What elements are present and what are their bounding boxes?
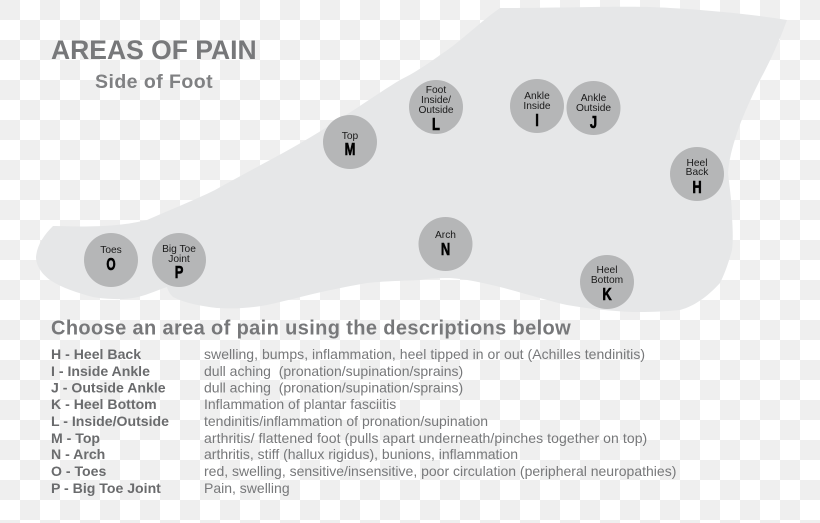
marker: Foot Inside/Outside L: Outside xyxy=(418,105,454,116)
marker: Top M xyxy=(323,115,377,169)
marker: Big Toe Joint P: P xyxy=(175,263,183,283)
marker: Heel Back H xyxy=(670,147,724,201)
description list: J - Outside Ankle xyxy=(51,380,166,396)
marker: Foot Inside/Outside L: L xyxy=(432,115,440,135)
foot silhouette xyxy=(36,7,787,312)
marker: Heel Bottom K: K xyxy=(602,285,612,305)
marker: Heel Back H: Heel xyxy=(687,158,707,169)
marker: Ankle Outside J: Ankle xyxy=(581,93,607,104)
description list: O - Toes xyxy=(51,463,106,479)
marker: Heel Bottom K xyxy=(580,255,634,309)
description list: P - Big Toe Joint xyxy=(51,480,161,496)
marker: Toes O: O xyxy=(106,255,116,275)
marker: Ankle Outside J: J xyxy=(590,113,597,133)
description list: Pain, swelling xyxy=(204,480,290,496)
description list: Inflammation of plantar fasciitis xyxy=(204,396,396,412)
description list xyxy=(51,346,676,496)
marker: Big Toe Joint P xyxy=(152,233,206,287)
description list: N - Arch xyxy=(51,446,105,462)
marker: Ankle Inside I: Inside xyxy=(523,101,551,112)
description list: arthritis/ flattened foot (pulls apart underneath/pinches together on top) xyxy=(204,430,647,446)
description list: swelling, bumps, inflammation, heel tipped in or out (Achilles tendinitis) xyxy=(204,346,645,362)
marker: Arch N: Arch xyxy=(435,230,456,241)
marker: Ankle Outside J xyxy=(566,81,620,135)
description list: I - Inside Ankle xyxy=(51,363,150,379)
marker: Ankle Inside I: Ankle xyxy=(524,91,550,102)
marker: Big Toe Joint P: Joint xyxy=(168,254,190,265)
description list: H - Heel Back xyxy=(51,346,141,362)
marker: Toes O xyxy=(84,233,138,287)
marker: Foot Inside/Outside L: Inside/ xyxy=(421,95,451,106)
description list: arthritis, stiff (hallux rigidus), bunions, inflammation xyxy=(204,446,518,462)
marker: Top M: M xyxy=(345,140,355,160)
marker: Arch N: N xyxy=(441,240,450,260)
description list: L - Inside/Outside xyxy=(51,413,169,429)
marker: Ankle Outside J: Outside xyxy=(576,103,611,114)
description list: tendinitis/inflammation of pronation/supination xyxy=(204,413,488,429)
marker: Big Toe Joint P: Big Toe xyxy=(162,244,196,255)
marker: Heel Bottom K: Heel xyxy=(597,265,617,276)
section heading: Choose an area of pain using the descriptions below xyxy=(51,318,571,340)
marker: Ankle Inside I xyxy=(510,79,564,133)
marker: Ankle Inside I: I xyxy=(535,111,539,131)
description list: K - Heel Bottom xyxy=(51,396,157,412)
marker: Heel Back H: H xyxy=(692,178,702,198)
description list: dull aching (pronation/supination/sprains) xyxy=(204,363,463,379)
marker: Foot Inside/Outside L xyxy=(409,80,463,135)
marker: Heel Bottom K: Bottom xyxy=(591,275,623,286)
marker: Foot Inside/Outside L: Foot xyxy=(426,85,446,96)
marker: Toes O: Toes xyxy=(100,245,122,256)
description list: M - Top xyxy=(51,430,100,446)
title: AREAS OF PAIN xyxy=(51,35,257,65)
marker: Heel Back H: Back xyxy=(686,167,709,178)
subtitle: Side of Foot xyxy=(95,71,213,93)
description list: dull aching (pronation/supination/sprains) xyxy=(204,380,463,396)
marker: Arch N xyxy=(418,217,472,271)
description list: red, swelling, sensitive/insensitive, poor circulation (peripheral neuropathies) xyxy=(204,463,676,479)
marker: Top M: Top xyxy=(342,131,359,142)
